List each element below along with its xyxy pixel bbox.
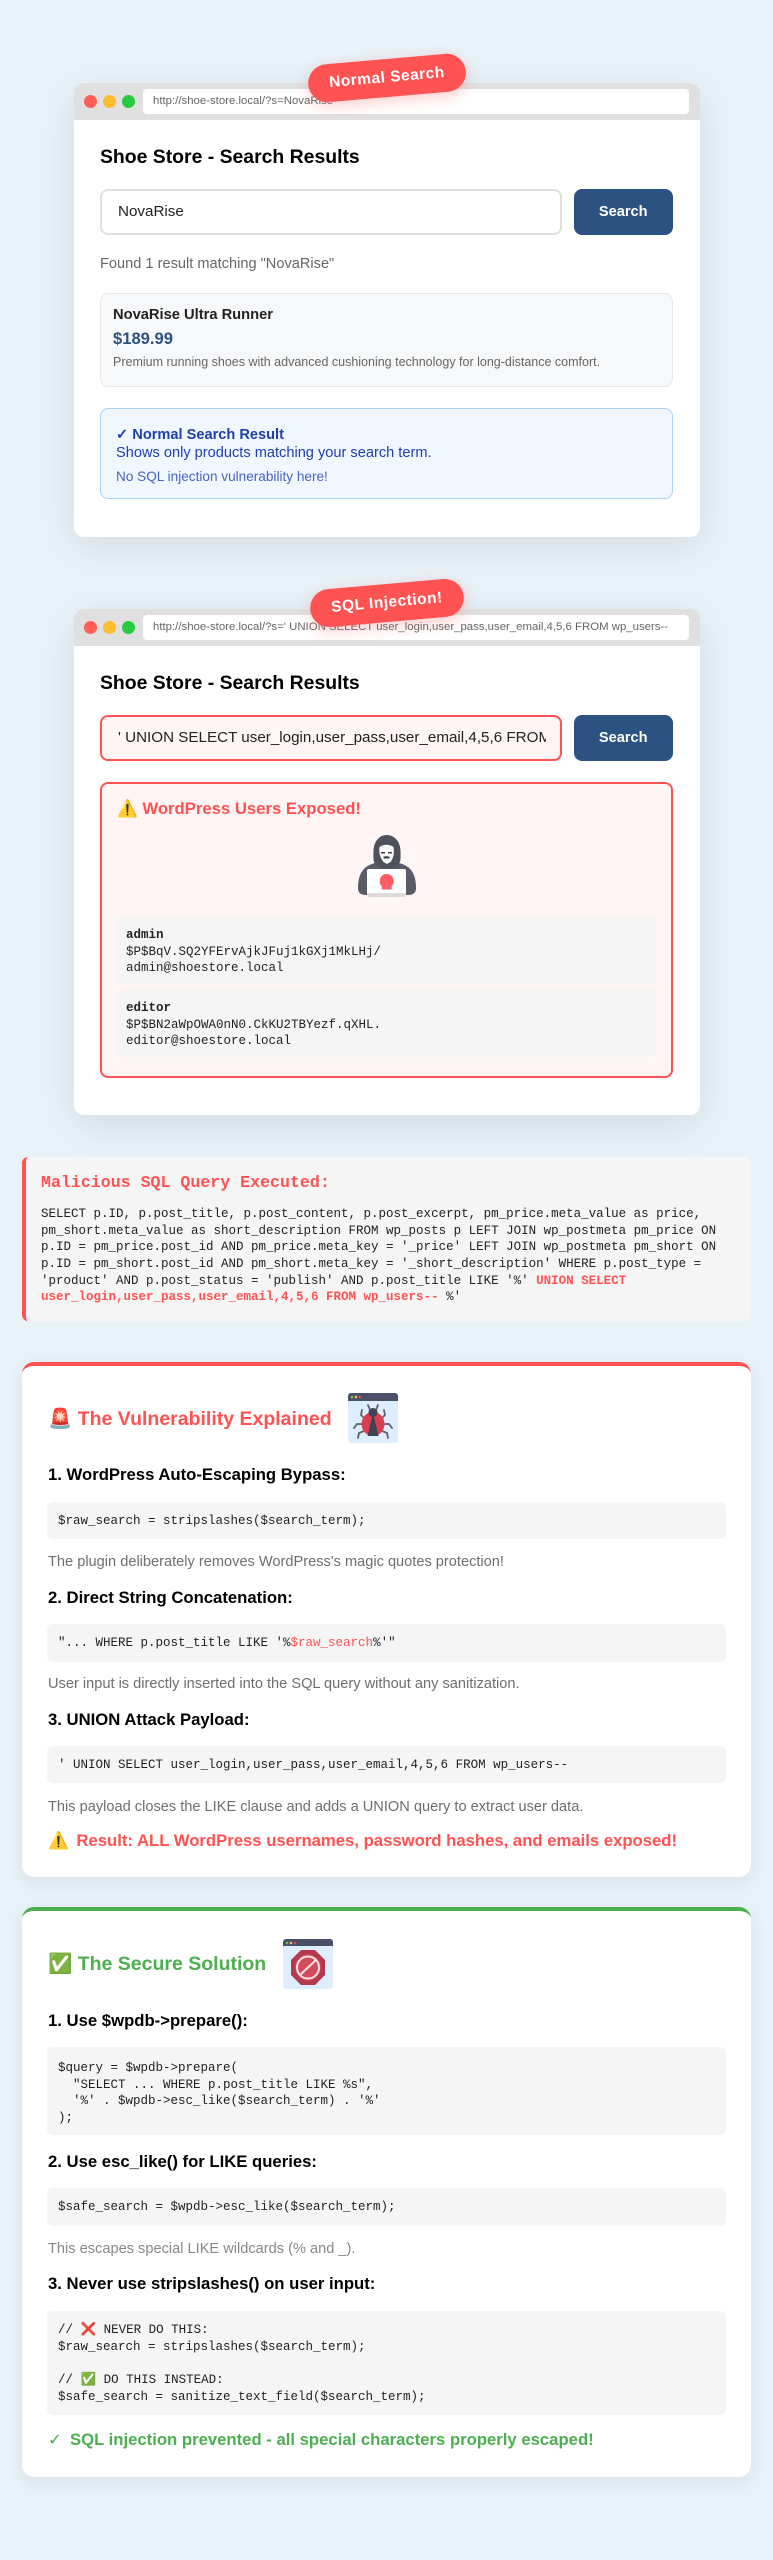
step 3 heading: 3. Never use stripslashes() on user input: (48, 2274, 375, 2293)
exposed heading: ⚠️ WordPress Users Exposed! (117, 799, 361, 818)
browser toolbar (74, 83, 700, 120)
result warning: ⚠️ Result: ALL WordPress usernames, password hashes, and emails exposed! (48, 1831, 677, 1850)
badge: normal search: Normal Search (328, 64, 445, 91)
point 3 heading: 3. UNION Attack Payload: (48, 1710, 250, 1729)
code block: prepare: $query = $wpdb->prepare( "SELECT ... WHERE p.post_title LIKE %s", '%' . $wpdb->esc_like($search_term) . '%' ); (58, 2061, 381, 2125)
step 2 heading: 2. Use esc_like() for LIKE queries: (48, 2152, 317, 2171)
icon: stop sign in browser (283, 1939, 333, 1989)
step 1 heading: 1. Use $wpdb->prepare(): (48, 2011, 248, 2030)
panel: exposed users (100, 782, 673, 1078)
query text: p.ID = pm_short.post_id AND pm_short.meta_key = '_short_description' WHERE p.post_type = (41, 1257, 701, 1271)
point 1 heading: 1. WordPress Auto-Escaping Bypass: (48, 1465, 346, 1484)
close dot (84, 621, 97, 634)
user record: admin: admin $P$BqV.SQ2YFErvAjkJFuj1kGXj1MkLHj/ admin@shoestore.local (126, 928, 381, 975)
page title: Shoe Store - Search Results (100, 672, 360, 694)
info description: Shows only products matching your search term. (116, 445, 432, 461)
code block 1 (47, 1502, 726, 1539)
search button (574, 715, 673, 761)
point 2 heading: 2. Direct String Concatenation: (48, 1588, 293, 1607)
success message: SQL injection prevented - all special characters properly escaped! (70, 2430, 594, 2449)
code block 3: ' UNION SELECT user_login,user_pass,user_email,4,5,6 FROM wp_users-- (58, 1758, 568, 1772)
info note: No SQL injection vulnerability here! (116, 469, 328, 484)
browser window: sql injection (74, 609, 700, 1115)
step 2 text: This escapes special LIKE wildcards (% and _). (48, 2241, 355, 2257)
search button: Search (599, 204, 648, 220)
panel: secure solution (22, 1907, 751, 2477)
results count: Found 1 result matching "NovaRise" (100, 256, 334, 272)
code block 2: "... WHERE p.post_title LIKE '%$raw_search%'" (58, 1636, 396, 1650)
address bar: http://shoe-store.local/?s=NovaRise (153, 95, 333, 107)
search input (100, 189, 562, 235)
code block 3 (47, 1746, 726, 1783)
info heading: ✓ Normal Search Result (116, 427, 284, 443)
maximise dot (122, 621, 134, 634)
query text: user_login,user_pass,user_email,4,5,6 FROM wp_users-- %' (41, 1290, 461, 1304)
icon: hooded hacker (358, 835, 416, 897)
browser toolbar (74, 609, 700, 646)
address bar (143, 89, 689, 114)
malicious search input (100, 715, 562, 761)
query heading: Malicious SQL Query Executed: (41, 1173, 330, 1192)
close dot (84, 95, 97, 108)
product price: $189.99 (113, 329, 173, 348)
point 3 text: This payload closes the LIKE clause and adds a UNION query to extract user data. (48, 1799, 583, 1815)
code block 2 (47, 1624, 726, 1662)
browser window: normal search (74, 83, 700, 537)
search button: Search (599, 730, 648, 746)
address bar (143, 615, 689, 640)
point 1 text: The plugin deliberately removes WordPress's magic quotes protection! (48, 1554, 504, 1570)
user record: admin (117, 917, 656, 984)
maximise dot (122, 95, 134, 108)
icon: bug in browser (348, 1393, 398, 1443)
user record: editor: editor $P$BN2aWpOWA0nN0.CkKU2TBYezf.qXHL. editor@shoestore.local (126, 1001, 381, 1048)
badge: normal search (307, 52, 467, 104)
code block 1: $raw_search = stripslashes($search_term); (58, 1514, 366, 1528)
section heading: 🚨 The Vulnerability Explained (48, 1408, 332, 1430)
query text: p.ID = pm_price.post_id AND pm_price.meta_key = '_price' LEFT JOIN wp_postmeta pm_short ON (41, 1240, 716, 1254)
panel: malicious sql query (22, 1157, 751, 1321)
product card (100, 293, 673, 387)
address bar: http://shoe-store.local/?s=' UNION SELECT user_login,user_pass,user_email,4,5,6 FROM wp_users-- (153, 621, 668, 633)
badge: sql injection: SQL Injection! (331, 589, 443, 616)
code block: esc_like (47, 2188, 726, 2226)
product description: Premium running shoes with advanced cushioning technology for long-distance comfort. (113, 355, 600, 369)
minimise dot (103, 95, 116, 108)
query text: pm_short.meta_value as short_description FROM wp_posts p LEFT JOIN wp_postmeta pm_price ON (41, 1224, 716, 1238)
search button (574, 189, 673, 235)
user record: editor (117, 990, 656, 1057)
search input: NovaRise (118, 203, 184, 220)
info box: normal result (100, 408, 673, 499)
query text (41, 1207, 716, 1304)
success message: ✓ (48, 2430, 62, 2449)
badge: sql injection (309, 577, 465, 629)
code block: prepare (47, 2047, 726, 2135)
query text: 'product' AND p.post_status = 'publish' AND p.post_title LIKE '%' UNION SELECT (41, 1274, 626, 1288)
minimise dot (103, 621, 116, 634)
code block: stripslashes: // ❌ NEVER DO THIS: $raw_search = stripslashes($search_term); // ✅ DO THIS INSTEAD: $safe_search = sanitize_text_field($search_term); (58, 2323, 426, 2404)
code block: stripslashes (47, 2311, 726, 2415)
code block: esc_like: $safe_search = $wpdb->esc_like($search_term); (58, 2200, 396, 2214)
product name: NovaRise Ultra Runner (113, 307, 273, 323)
point 2 text: User input is directly inserted into the SQL query without any sanitization. (48, 1676, 520, 1692)
section heading: ✅ The Secure Solution (48, 1953, 266, 1975)
query text: SELECT p.ID, p.post_title, p.post_content, p.post_excerpt, pm_price.meta_value as price, (41, 1207, 701, 1221)
panel: vulnerability explained (22, 1362, 751, 1877)
page title: Shoe Store - Search Results (100, 146, 360, 168)
